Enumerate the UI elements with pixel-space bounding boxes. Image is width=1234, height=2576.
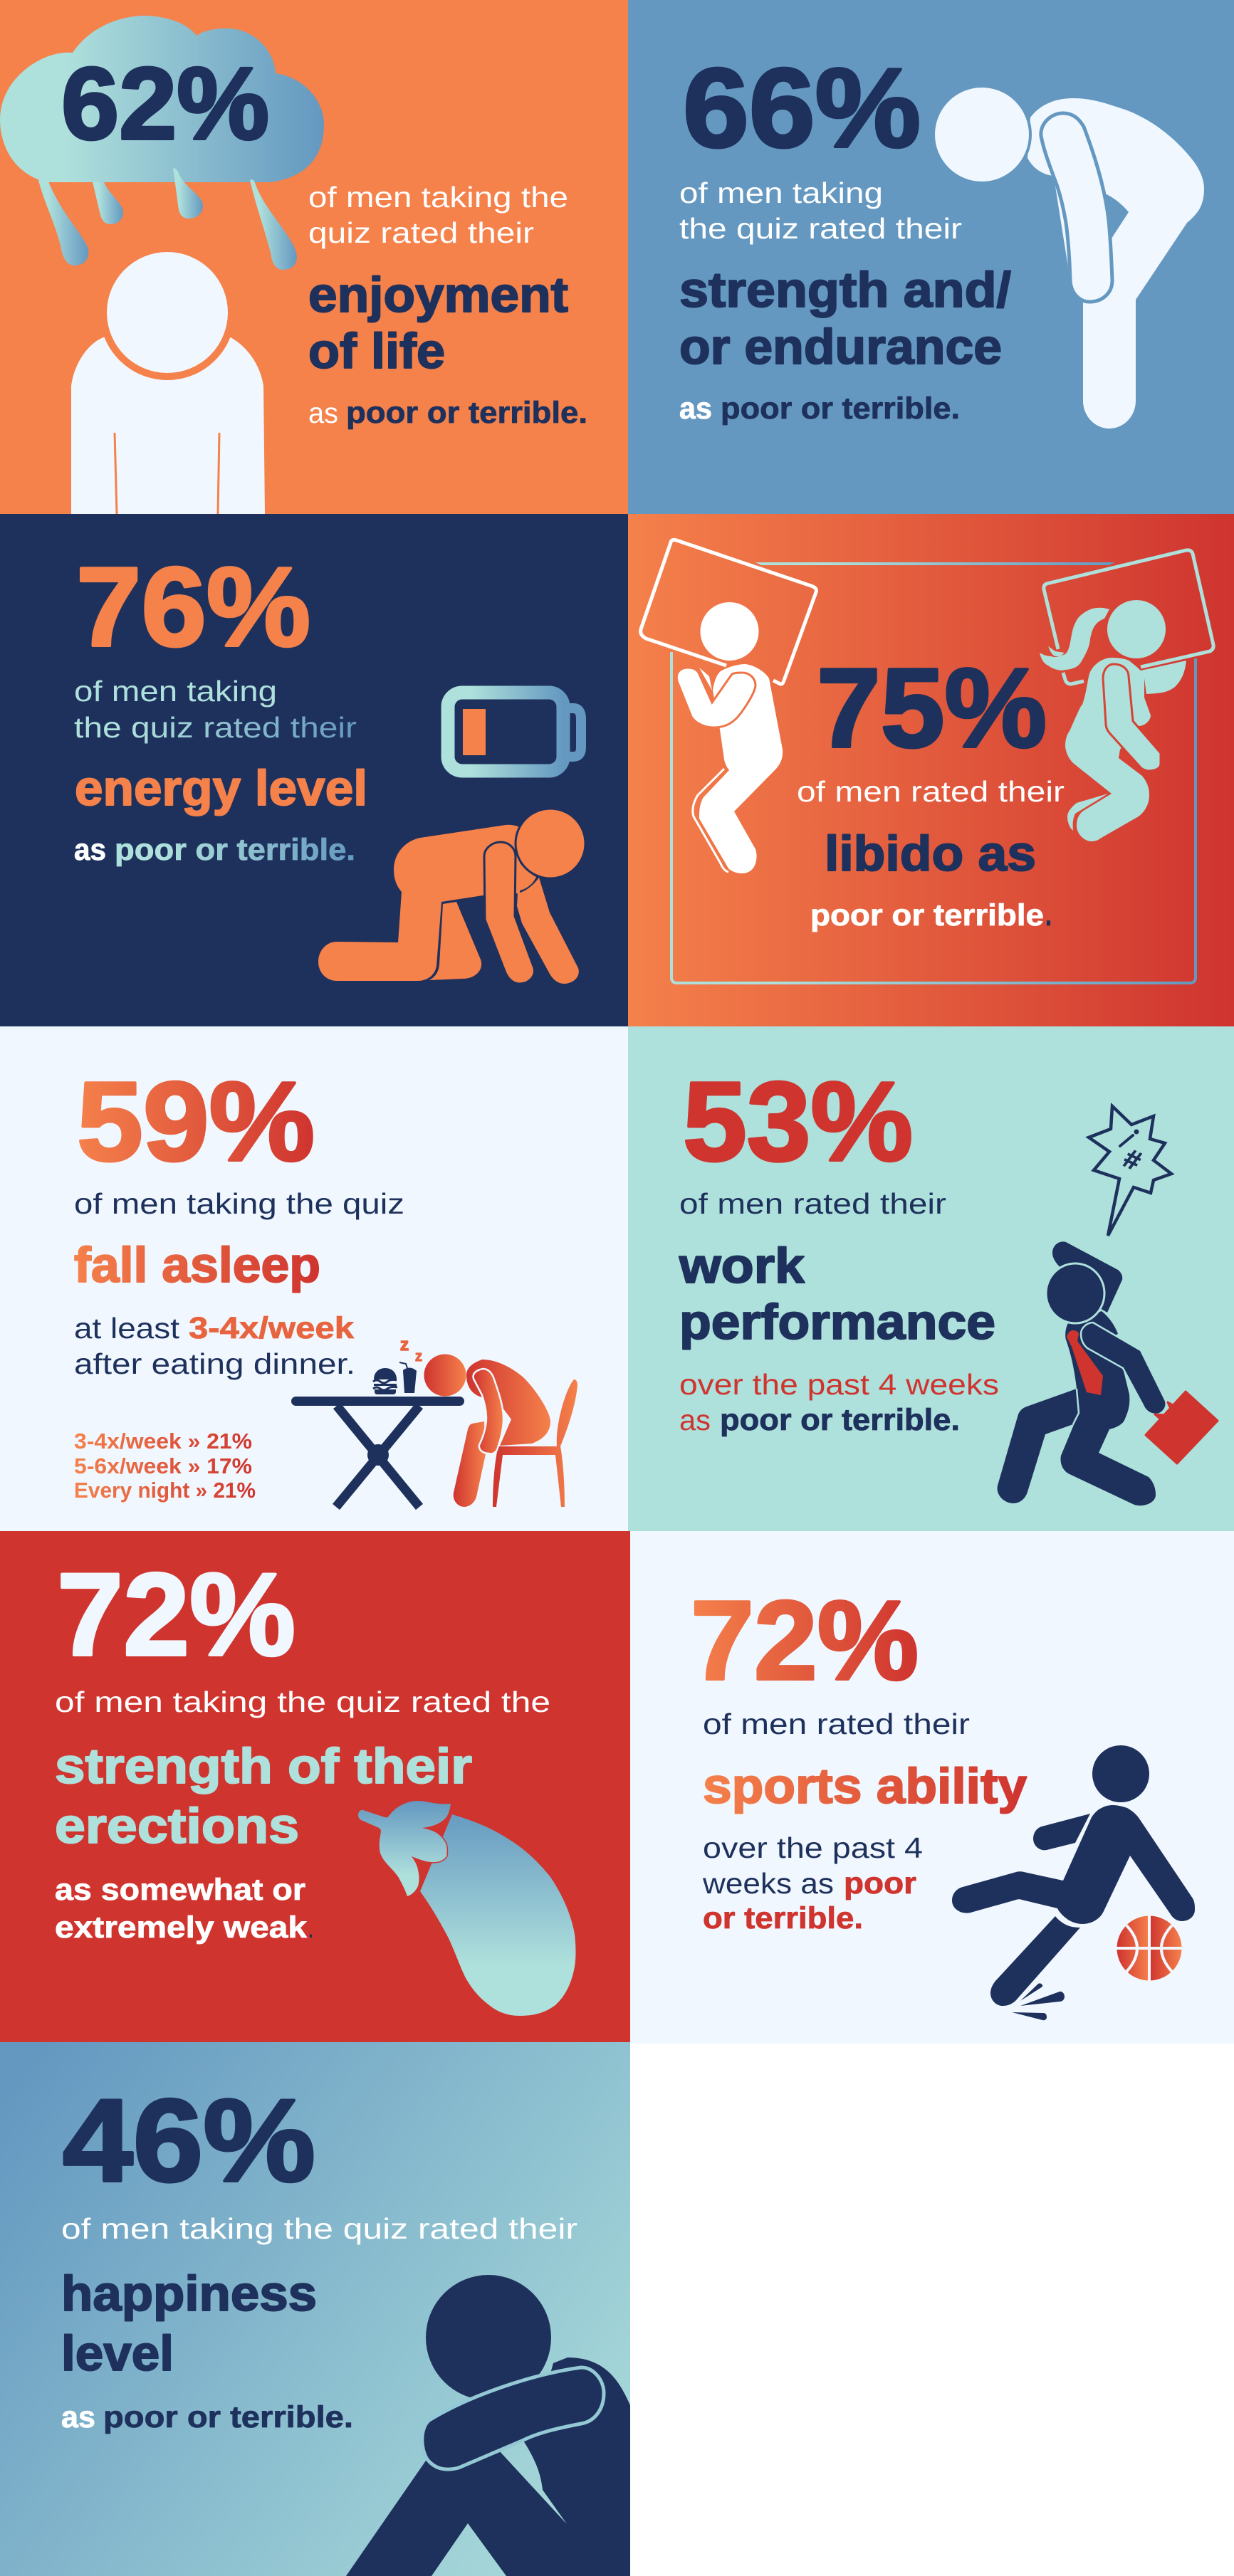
- panel: strength and endurance: [628, 0, 1234, 514]
- icon: sleep z letters: [400, 1335, 422, 1365]
- frequency list: Every night » 21%: [74, 1478, 256, 1503]
- panel: strength of erections: [0, 1531, 630, 2042]
- text block: or terrible.: [703, 1901, 863, 1935]
- text block: as: [679, 1404, 711, 1436]
- icon: person on all fours: [318, 809, 585, 984]
- text block: fall asleep: [74, 1237, 320, 1293]
- text block: sports ability: [703, 1758, 1027, 1814]
- panel: happiness level: [0, 2042, 630, 2576]
- text block: poor or terrible.: [346, 396, 587, 430]
- text block: poor or terrible.: [720, 1403, 960, 1437]
- heading: 46%: 46%: [63, 2075, 315, 2206]
- text block: of men taking the: [308, 181, 568, 214]
- icon: angry speech bubble: #: [1119, 1144, 1145, 1177]
- text block: [74, 675, 367, 867]
- frequency list: 5-6x/week » 17%: [74, 1453, 252, 1478]
- frequency list: 3-4x/week » 21%: [74, 1429, 252, 1453]
- text block: of men taking the quiz rated their: [61, 2212, 577, 2245]
- icon: bent over person: [934, 86, 1204, 429]
- heading: 72%: 72%: [691, 1578, 919, 1703]
- text block: work: [679, 1238, 805, 1293]
- icon: person asleep at table: [424, 1354, 577, 1507]
- text block: weeks as: [702, 1867, 834, 1900]
- text block: erections: [55, 1798, 299, 1854]
- burger: [373, 1368, 397, 1394]
- icon: right pillow: [1044, 550, 1213, 684]
- text block: as: [74, 833, 106, 867]
- icon: basketball: [1117, 1915, 1182, 1981]
- heading: 75%: 75%: [817, 646, 1047, 771]
- icon: falling basketball player: [952, 1745, 1195, 2020]
- text block: energy level: [75, 760, 367, 816]
- drink: [399, 1362, 417, 1393]
- text block: poor or terrible.: [103, 2400, 353, 2434]
- text block: [797, 775, 1065, 932]
- text block: [74, 1187, 404, 1380]
- icon: man lying in bed: [676, 602, 783, 873]
- text block: of men taking: [679, 177, 883, 209]
- text block: [55, 1686, 550, 1945]
- text block: [61, 2212, 577, 2434]
- text block: over the past 4 weeks: [679, 1368, 999, 1401]
- panel: libido: [628, 514, 1234, 1026]
- heading: 72%: 72%: [57, 1549, 296, 1680]
- text block: [308, 181, 587, 430]
- icon: stressed worker: [998, 1241, 1218, 1505]
- sparks: [1012, 1983, 1065, 2020]
- text block: as: [679, 391, 712, 426]
- panel: energy level: [0, 514, 628, 1026]
- text block: [679, 1187, 999, 1437]
- panel: enjoyment of life: [0, 0, 628, 514]
- text block: or endurance: [679, 319, 1002, 374]
- heading: 66%: 66%: [683, 46, 921, 171]
- text block: poor or terrible: [810, 898, 1044, 932]
- icon: low battery: [448, 693, 581, 771]
- text block: the quiz rated their: [679, 212, 962, 245]
- icon: eggplant: [358, 1801, 575, 2016]
- text block: extremely weak: [55, 1910, 307, 1945]
- panel: work performance: [628, 1026, 1234, 1531]
- panel: fall asleep: [0, 1026, 628, 1531]
- text block: performance: [679, 1294, 995, 1350]
- text block: of men rated their: [797, 775, 1065, 808]
- text block: the quiz rated their: [74, 711, 357, 744]
- icon: left pillow: [641, 540, 816, 684]
- text block: of men taking: [74, 675, 277, 708]
- text block: of men taking the quiz: [74, 1187, 404, 1220]
- text block: strength of their: [55, 1738, 472, 1794]
- tie: [1067, 1330, 1103, 1395]
- text block: .: [1045, 898, 1052, 932]
- text block: [702, 1708, 1027, 1935]
- text block: poor or terrible.: [721, 391, 960, 426]
- text block: 3-4x/week: [189, 1311, 354, 1345]
- icon: sad person: [71, 245, 265, 514]
- text block: as somewhat or: [55, 1873, 305, 1907]
- icon: sleep z letters: z: [400, 1335, 409, 1355]
- text block: poor: [844, 1866, 916, 1901]
- text block: of men rated their: [679, 1187, 946, 1220]
- text block: over the past 4: [703, 1831, 923, 1864]
- bed outline: [671, 562, 1196, 983]
- text block: enjoyment: [308, 267, 568, 322]
- icon: woman lying in bed: [1040, 600, 1186, 841]
- text block: level: [61, 2325, 174, 2381]
- icon: angry speech bubble: [1089, 1106, 1171, 1236]
- icon: table with burger and drink: [291, 1362, 464, 1507]
- heading: 76%: 76%: [76, 545, 310, 670]
- text block: .: [308, 1911, 314, 1944]
- frequency list: [74, 1429, 256, 1503]
- text block: libido as: [825, 826, 1036, 881]
- text block: quiz rated their: [308, 216, 534, 249]
- heading: 53%: 53%: [683, 1059, 913, 1184]
- text block: happiness: [61, 2266, 317, 2321]
- text block: as: [61, 2400, 95, 2434]
- text block: strength and/: [679, 262, 1011, 317]
- text block: poor or terrible.: [115, 833, 355, 867]
- icon: hunched sad person: [346, 2275, 630, 2576]
- text block: after eating dinner.: [74, 1347, 355, 1380]
- text block: of life: [308, 323, 445, 379]
- text block: at least: [74, 1312, 180, 1345]
- panel: sports ability: [630, 1531, 1234, 2044]
- icon: briefcase: [1146, 1392, 1218, 1463]
- icon: sleep z letters: z: [415, 1349, 422, 1365]
- icon: rain cloud: [0, 16, 324, 270]
- text block: as: [308, 396, 338, 429]
- heading: 62%: 62%: [61, 46, 269, 161]
- text block: of men rated their: [703, 1708, 970, 1740]
- text block: of men taking the quiz rated the: [55, 1686, 550, 1718]
- text block: [679, 177, 1011, 426]
- heading: 59%: 59%: [77, 1059, 315, 1184]
